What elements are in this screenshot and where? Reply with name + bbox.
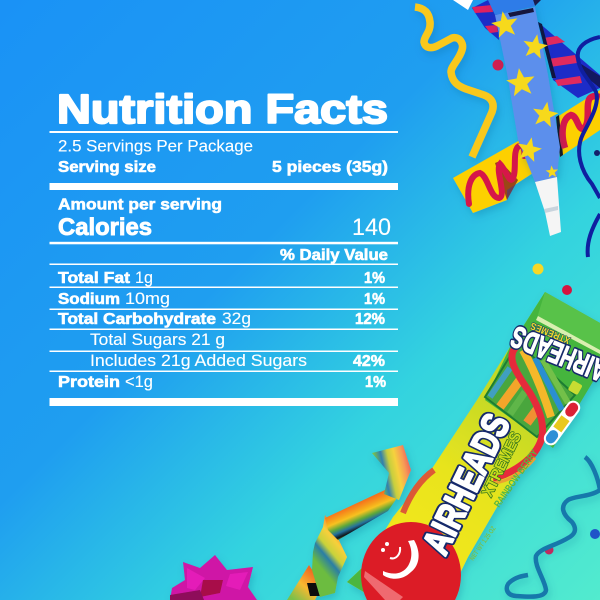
lime icon bbox=[568, 380, 582, 394]
icon: yellow wavy roll right bbox=[556, 90, 600, 157]
sodium row bbox=[58, 290, 385, 308]
added sugars row: Includes 21g Added Sugars bbox=[90, 351, 307, 370]
red logo circle bbox=[361, 522, 461, 600]
title: Nutrition Facts bbox=[57, 86, 388, 132]
amount per serving: Amount per serving bbox=[58, 196, 222, 214]
icon: navy ribbon bbox=[578, 37, 600, 257]
smiley logo bbox=[381, 540, 419, 579]
total fat row: Total Fat bbox=[58, 270, 131, 287]
total fat row bbox=[58, 269, 385, 287]
total carbohydrate row bbox=[58, 310, 385, 328]
candy inside window bbox=[403, 347, 568, 513]
brand name: AIRHEADS bbox=[415, 408, 519, 561]
confetti dots bbox=[492, 60, 600, 554]
sour rainbow candy strip bbox=[287, 445, 411, 600]
weight label: NET WT 1.25 OZ bbox=[469, 525, 498, 562]
icon: yellow wavy roll left bbox=[453, 140, 533, 213]
green upper pack bbox=[485, 292, 600, 448]
upside-down xtremes label: XTREMES bbox=[529, 319, 572, 345]
sodium row: 1% bbox=[364, 291, 385, 308]
divider lines bbox=[50, 131, 398, 406]
brand name: AIRHEADS bbox=[415, 408, 519, 561]
candy middle band bbox=[325, 489, 397, 540]
calories row: 140 bbox=[352, 214, 391, 241]
daily value heading: % Daily Value bbox=[280, 247, 388, 264]
crimp highlight bbox=[536, 316, 600, 354]
serving size row: Serving size bbox=[58, 159, 156, 176]
icon: white blower tip bbox=[535, 177, 561, 236]
upside-down brand name bbox=[509, 325, 600, 386]
total sugars row: Total Sugars 21 g bbox=[90, 330, 225, 349]
nutrition facts panel bbox=[50, 86, 398, 406]
total fat row: 1g bbox=[135, 269, 153, 287]
icon: white blower corner bbox=[453, 0, 473, 10]
total carbohydrate row: 32g bbox=[222, 310, 251, 328]
calories row: Calories bbox=[58, 214, 152, 241]
xtremes label: XTREMES bbox=[479, 429, 525, 500]
candy window bbox=[485, 343, 575, 437]
total carbohydrate row: Total Carbohydrate bbox=[58, 311, 216, 328]
icon: navy top corner bbox=[533, 0, 541, 6]
candy black notch bbox=[307, 583, 320, 596]
protein row: 1% bbox=[365, 374, 386, 391]
sodium row: Sodium bbox=[58, 291, 120, 308]
brand name bbox=[422, 412, 511, 559]
protein row: <1g bbox=[125, 373, 153, 391]
protein row: Protein bbox=[58, 374, 120, 391]
icon: striped ribbon right bbox=[538, 22, 600, 98]
candy twist bbox=[312, 515, 347, 597]
candy package bbox=[347, 292, 600, 600]
magenta gift bow bbox=[170, 555, 257, 600]
candy lower tail bbox=[287, 565, 317, 600]
total fat row: 1% bbox=[364, 270, 385, 287]
total carbohydrate row: 12% bbox=[355, 311, 385, 328]
calories row bbox=[58, 214, 391, 241]
flavor label: RAINBOW BERRY bbox=[492, 447, 541, 510]
icon: blue star blower bbox=[488, 0, 560, 182]
crimped top edge bbox=[537, 292, 600, 350]
icon: stars on blower bbox=[489, 9, 560, 178]
servings per package: 2.5 Servings Per Package bbox=[58, 138, 253, 156]
protein row bbox=[58, 373, 386, 391]
icon: yellow curled streamer bbox=[415, 7, 493, 157]
added sugars row: 42% bbox=[353, 353, 385, 370]
candy top curl bbox=[372, 445, 411, 500]
lower highlight on circle bbox=[364, 571, 403, 600]
teal curled ribbon bbox=[507, 457, 600, 597]
icon: striped ribbon left bbox=[472, 0, 499, 40]
sodium row: 10mg bbox=[125, 290, 170, 308]
crimped bottom edge bbox=[347, 568, 364, 592]
heat meter badge bbox=[544, 400, 582, 446]
party blower and streamers bbox=[415, 0, 600, 257]
serving size row: 5 pieces (35g) bbox=[272, 159, 388, 176]
serving size row bbox=[58, 159, 388, 176]
pack body bbox=[347, 292, 600, 600]
